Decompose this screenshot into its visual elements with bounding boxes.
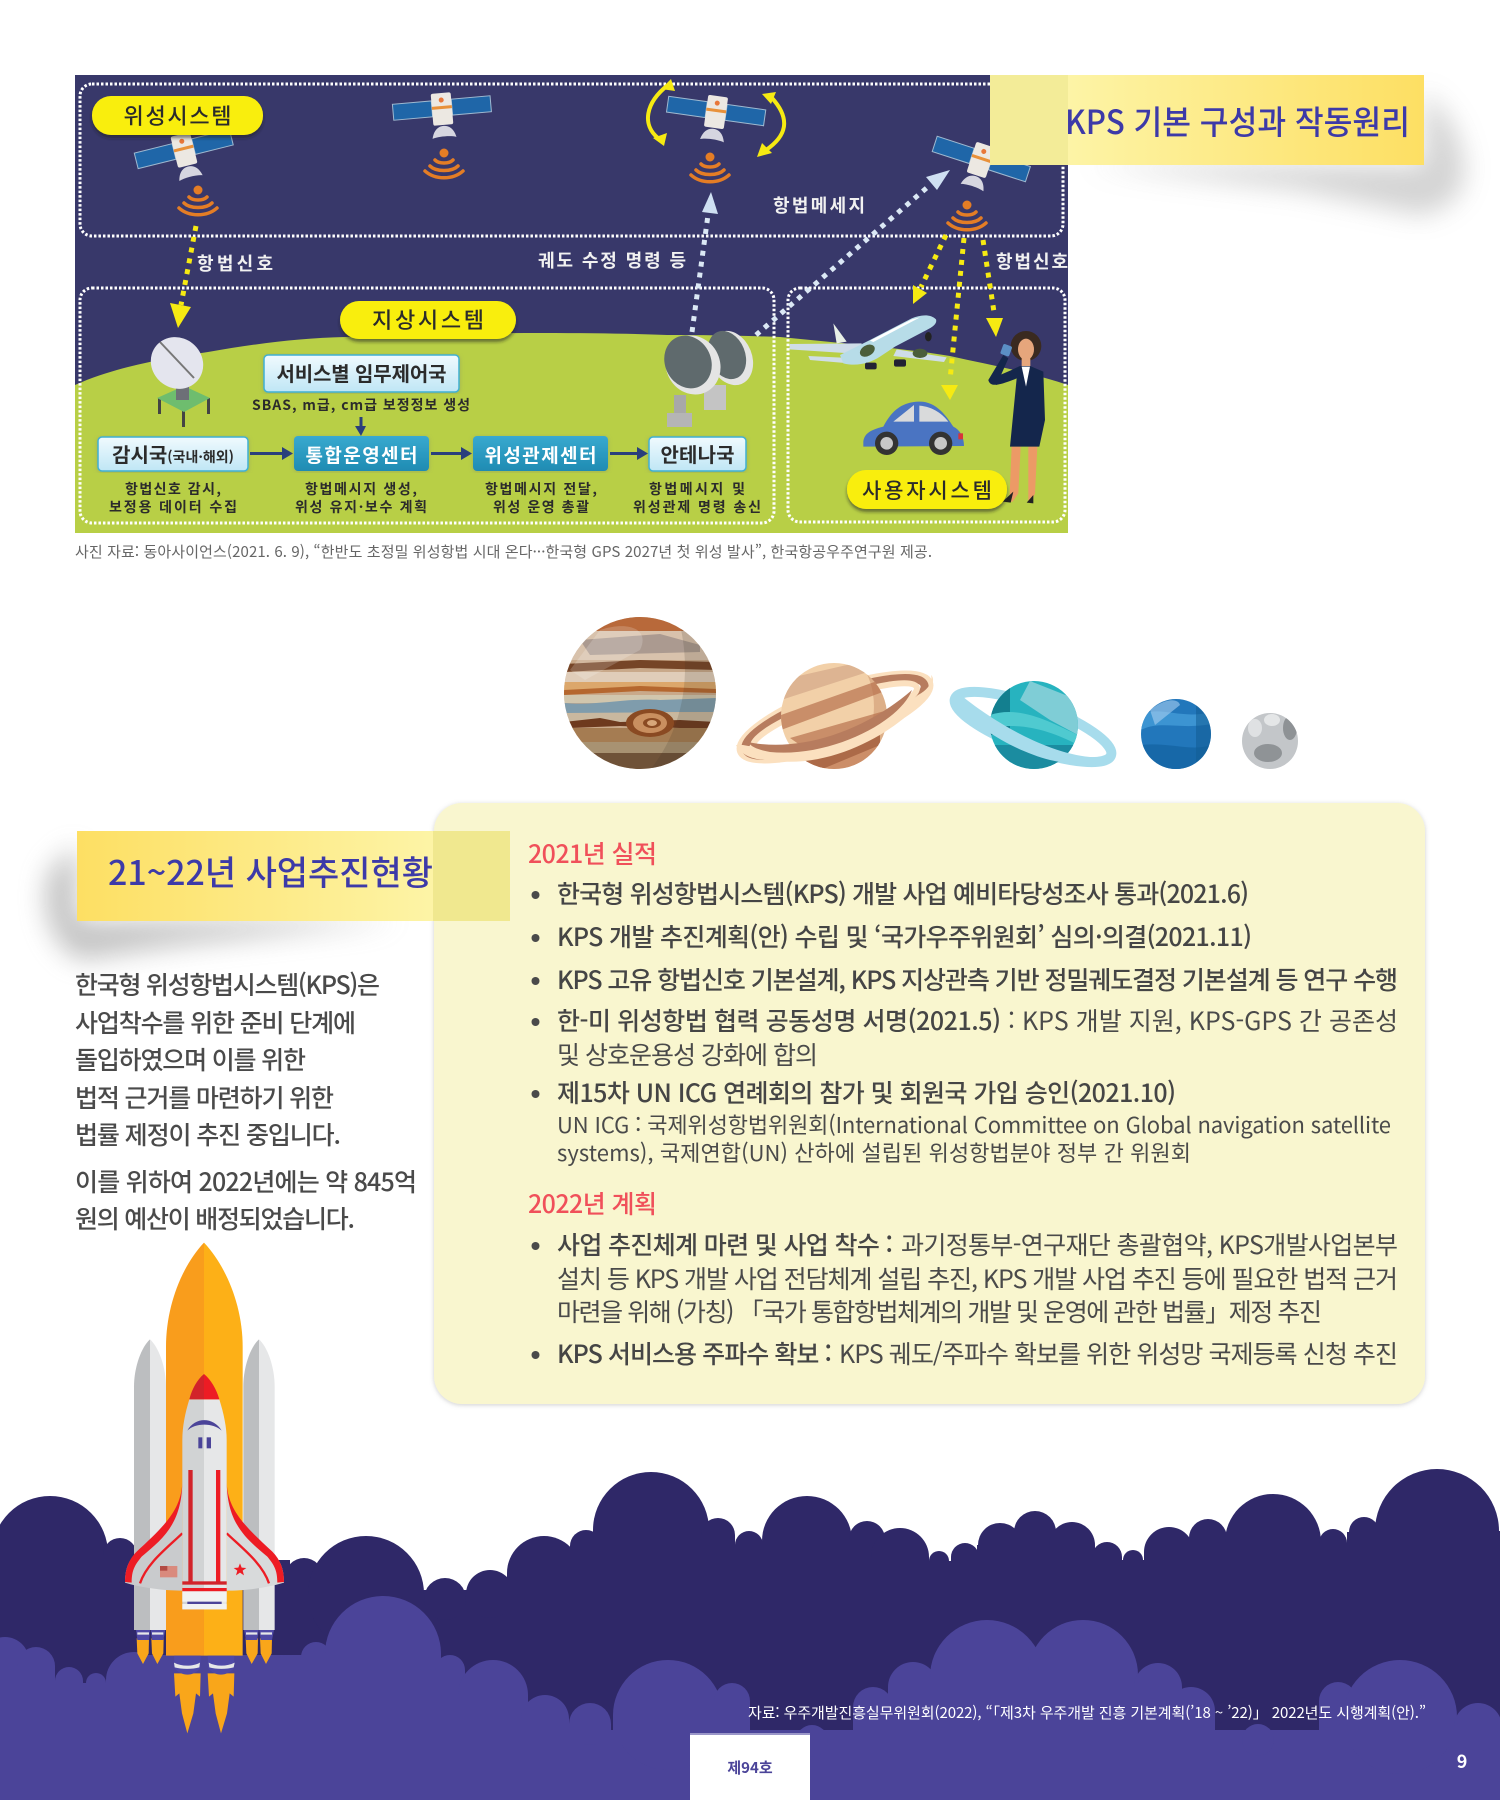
text: station roles: 보정용 데이터 수집	[109, 497, 237, 517]
satellite 4	[932, 136, 1031, 232]
list: 2021 results: UN ICG : 국제위성항법위원회(International Committee on Global navigation satellite	[557, 1108, 1391, 1140]
frame: ground system	[80, 288, 774, 523]
heading tag: 21-22 business status	[45, 831, 510, 960]
list: 2021 results: 한국형 위성항법시스템(KPS) 개발 사업 예비타당성조사 통과(2021.6)	[557, 875, 1249, 911]
list: 2022 plans: 마련을 위해 (가칭) 「국가 통합항법체계의 개발 및 운영에 관한 법률」제정 추진	[557, 1293, 1322, 1329]
icon: car	[863, 402, 964, 455]
text: KPS introduction: 원의 예산이 배정되었습니다.	[75, 1200, 355, 1236]
icon: woman with phone	[988, 331, 1045, 503]
box: operations center: 통합운영센터	[306, 441, 418, 468]
list: 2021 results	[532, 875, 1398, 1168]
list: 2022 plans: KPS 서비스용 주파수 확보 :	[557, 1335, 832, 1371]
list: 2022 plans	[532, 1226, 1398, 1371]
box: monitoring station	[98, 437, 248, 471]
pill: ground system	[340, 301, 516, 339]
icon: monitor station dish	[150, 337, 210, 427]
frame: satellite system	[80, 84, 1063, 236]
page number: 9	[1457, 1748, 1467, 1774]
pill: satellite system	[92, 96, 263, 135]
flames	[137, 1638, 272, 1733]
main tank	[166, 1243, 243, 1656]
heading: 2021 results: 2021년 실적	[528, 835, 657, 871]
arrow: navigation signal down	[170, 226, 196, 328]
text: station roles	[110, 482, 760, 514]
text: station roles: 위성관제 명령 송신	[633, 497, 761, 517]
list: 2021 results: KPS 개발 추진계획(안) 수립 및 ‘국가우주위원회’ 심의·의결(2021.11)	[557, 918, 1252, 954]
arrow: navigation message	[756, 170, 950, 335]
text: station roles: 항법메시지 생성,	[305, 479, 417, 499]
text: KPS introduction: 이를 위하여 2022년에는 약 845억	[75, 1163, 417, 1199]
text: station roles: 항법메시지 및	[649, 479, 745, 499]
ground hill	[75, 333, 1068, 533]
frame: user system	[788, 288, 1065, 522]
planet: Saturn	[736, 663, 934, 769]
planet: Neptune	[1140, 699, 1212, 770]
label: navigation signal: 항법신호	[197, 250, 273, 276]
list: 2022 plans: 과기정통부-연구재단 총괄협약, KPS개발사업본부	[901, 1226, 1398, 1262]
list: 2021 results: : KPS 개발 지원, KPS-GPS 간 공존성	[1008, 1002, 1398, 1038]
icon: airplane	[789, 315, 947, 369]
orbit arrows	[648, 79, 784, 157]
label: navigation message: 항법메세지	[773, 192, 865, 218]
icon: space shuttle rocket	[125, 1243, 284, 1733]
pill: satellite system: 위성시스템	[124, 99, 232, 131]
pill: user system	[847, 470, 1007, 509]
heading tag: KPS principle: KPS 기본 구성과 작동원리	[1065, 96, 1410, 144]
list: 2022 plans: 설치 등 KPS 개발 사업 전담체계 설립 추진, KPS 개발 사업 추진 등에 필요한 법적 근거	[557, 1260, 1398, 1296]
arrows: process flow	[250, 447, 648, 460]
issue tab: 제94호	[727, 1757, 773, 1778]
arrows: signals to users	[913, 235, 1003, 400]
arrow: uplink command	[692, 192, 718, 332]
list: 2022 plans: KPS 궤도/주파수 확보를 위한 위성망 국제등록 신청 추진	[839, 1335, 1398, 1371]
heading: 2022 plans: 2022년 계획	[528, 1185, 657, 1221]
panel: 2021-2022 results and plans	[434, 803, 1425, 1404]
list: 2021 results: 및 상호운용성 강화에 합의	[557, 1036, 818, 1072]
issue tab	[690, 1733, 810, 1800]
planet: Jupiter	[564, 617, 716, 770]
clouds: dark back layer	[0, 1469, 1500, 1800]
text: KPS introduction: 법률 제정이 추진 중입니다.	[75, 1116, 341, 1152]
satellite 3	[663, 89, 767, 182]
label: orbit correction: 궤도 수정 명령 등	[538, 247, 686, 273]
orbiter body	[160, 1374, 246, 1609]
heading tag: KPS principle	[990, 75, 1465, 215]
list: 2021 results: 제15차 UN ICG 연례회의 참가 및 회원국 가입 승인(2021.10)	[557, 1074, 1176, 1110]
clouds: indigo front layer	[0, 1596, 1500, 1800]
nozzles	[136, 1630, 274, 1675]
text: station roles: 항법신호 감시,	[125, 479, 221, 499]
panel: KPS diagram	[75, 75, 1068, 533]
box: satellite control center	[473, 436, 608, 471]
caption: photo source: 사진 자료: 동아사이언스(2021. 6. 9), “한반도 초정밀 위성항법 시대 온다···한국형 GPS 2027년 첫 위성 발사”, 한국항공우주연구원 제공.	[75, 541, 932, 562]
list: 2021 results: systems), 국제연합(UN) 산하에 설립된 위성항법분야 정부 간 위원회	[557, 1136, 1191, 1168]
pill: ground system: 지상시스템	[372, 303, 484, 335]
list: 2022 plans: 사업 추진체계 마련 및 사업 착수 :	[557, 1226, 893, 1262]
heading tag: 21-22 business status: 21~22년 사업추진현황	[108, 846, 433, 895]
label: SBAS: SBAS, m급, cm급 보정정보 생성	[252, 395, 470, 415]
list: 2021 results: KPS 고유 항법신호 기본설계, KPS 지상관측 기반 정밀궤도결정 기본설계 등 연구 수행	[557, 961, 1398, 997]
wings	[125, 1480, 284, 1591]
box: mission control	[264, 355, 459, 392]
text: station roles: 위성 운영 총괄	[493, 497, 589, 517]
box: operations center	[294, 436, 429, 471]
text: KPS introduction: 돌입하였으며 이를 위한	[75, 1041, 306, 1077]
box: monitoring station: 감시국(국내·해외)	[112, 439, 234, 468]
arrow: down to center	[355, 417, 366, 436]
text: station roles: 항법메시지 전달,	[485, 479, 597, 499]
source note: 자료: 우주개발진흥실무위원회(2022), “「제3차 우주개발 진흥 기본계획(’18 ~ ’22)」 2022년도 시행계획(안).”	[748, 1702, 1426, 1723]
box: antenna station	[649, 437, 746, 471]
planet: Uranus	[950, 681, 1116, 769]
text: KPS introduction: 한국형 위성항법시스템(KPS)은	[75, 966, 380, 1002]
planets	[564, 617, 1300, 778]
satellite 1	[134, 135, 234, 216]
text: KPS introduction	[75, 966, 417, 1236]
satellite 2	[392, 89, 493, 178]
pill: user system: 사용자시스템	[862, 475, 992, 505]
box: satellite control center: 위성관제센터	[484, 441, 596, 468]
boosters	[134, 1339, 275, 1630]
text: station roles: 위성 유지·보수 계획	[295, 497, 427, 517]
list: 2021 results: 한-미 위성항법 협력 공동성명 서명(2021.5)	[557, 1002, 1001, 1038]
label: navigation signal right: 항법신호	[996, 248, 1068, 274]
icon: antenna dishes	[664, 330, 754, 427]
box: antenna station: 안테나국	[660, 439, 734, 468]
planet: moon	[1242, 712, 1300, 770]
text: KPS introduction: 사업착수를 위한 준비 단계에	[75, 1004, 356, 1040]
text: KPS introduction: 법적 근거를 마련하기 위한	[75, 1079, 334, 1115]
box: mission control: 서비스별 임무제어국	[276, 358, 446, 387]
